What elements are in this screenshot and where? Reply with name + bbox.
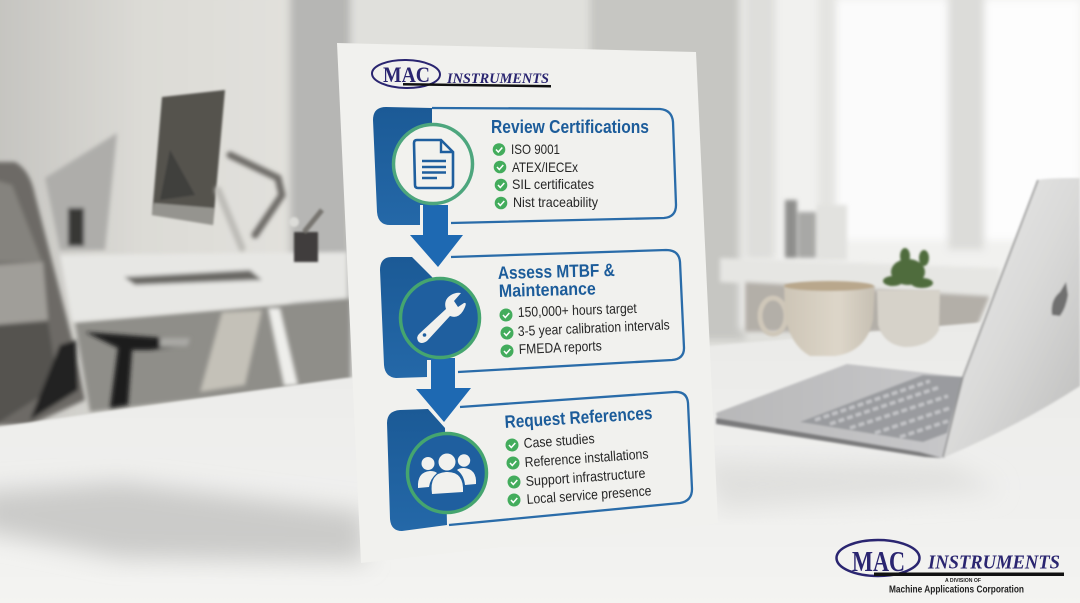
list: maintenance: FMEDA reports (518, 337, 602, 357)
list: references: Reference installations (524, 445, 649, 470)
cup and plant (760, 248, 940, 356)
card logo: MAC Instruments: MAC (383, 62, 430, 87)
window sill (720, 200, 1000, 332)
monitor (152, 90, 225, 225)
poster card (337, 43, 718, 563)
card logo: MAC Instruments (372, 59, 551, 89)
list: references: Local service presence (526, 482, 652, 507)
list: references (506, 430, 652, 507)
wall (0, 0, 1080, 430)
panel 3 colour block (387, 409, 447, 531)
heading: assess MTBF and maintenance: Maintenance (499, 278, 596, 301)
heading: assess MTBF and maintenance (498, 260, 615, 301)
arrow 2 (416, 358, 471, 422)
monitor arm (218, 155, 282, 248)
panel: assess MTBF and maintenance (380, 250, 684, 422)
laptop (716, 178, 1080, 458)
list: maintenance (500, 300, 670, 358)
list: references: Support infrastructure (525, 465, 646, 489)
panel 2 colour block (380, 257, 440, 378)
arrow 1 (410, 205, 463, 267)
icon: people group (408, 434, 486, 512)
list: certifications: ISO 9001 (511, 141, 560, 157)
corner logo: MAC Instruments, Machine Applications Corporation: A DIVISION OF (945, 578, 981, 584)
table top (0, 322, 1080, 603)
list: certifications: ATEX/IECEx (512, 159, 578, 175)
corner logo: MAC Instruments, Machine Applications Corporation: MAC (852, 546, 905, 578)
heading: review certifications: Review Certifications (491, 117, 649, 137)
icon: document (394, 124, 472, 204)
list: certifications (493, 141, 598, 210)
list: references: Case studies (523, 430, 595, 451)
panel: review certifications (373, 107, 676, 267)
corner logo: MAC Instruments, Machine Applications Corporation (836, 540, 1064, 596)
list: certifications: SIL certificates (512, 176, 594, 192)
second monitor (45, 133, 117, 250)
corner logo: MAC Instruments, Machine Applications Corporation: Machine Applications Corporation (889, 584, 1024, 596)
heading: request references: Request References (504, 403, 653, 432)
heading: assess MTBF and maintenance: Assess MTBF & (498, 260, 615, 283)
table shadow left (0, 482, 365, 562)
icon: wrench (400, 278, 480, 358)
panel 1 outline (432, 108, 676, 223)
chair (0, 162, 190, 425)
list: maintenance: 3-5 year calibration intervals (517, 316, 670, 339)
card logo: MAC Instruments: INSTRUMENTS (446, 71, 549, 87)
list: maintenance: 150,000+ hours target (518, 300, 637, 320)
corner logo: MAC Instruments, Machine Applications Corporation: INSTRUMENTS (927, 552, 1060, 574)
pen cup (289, 210, 322, 262)
panel 2 outline (451, 250, 684, 372)
panel: request references (387, 392, 692, 531)
panel 3 outline (449, 392, 692, 525)
list: certifications: Nist traceability (513, 194, 598, 210)
left desk underside (75, 298, 350, 412)
panel 1 colour block (373, 107, 432, 225)
